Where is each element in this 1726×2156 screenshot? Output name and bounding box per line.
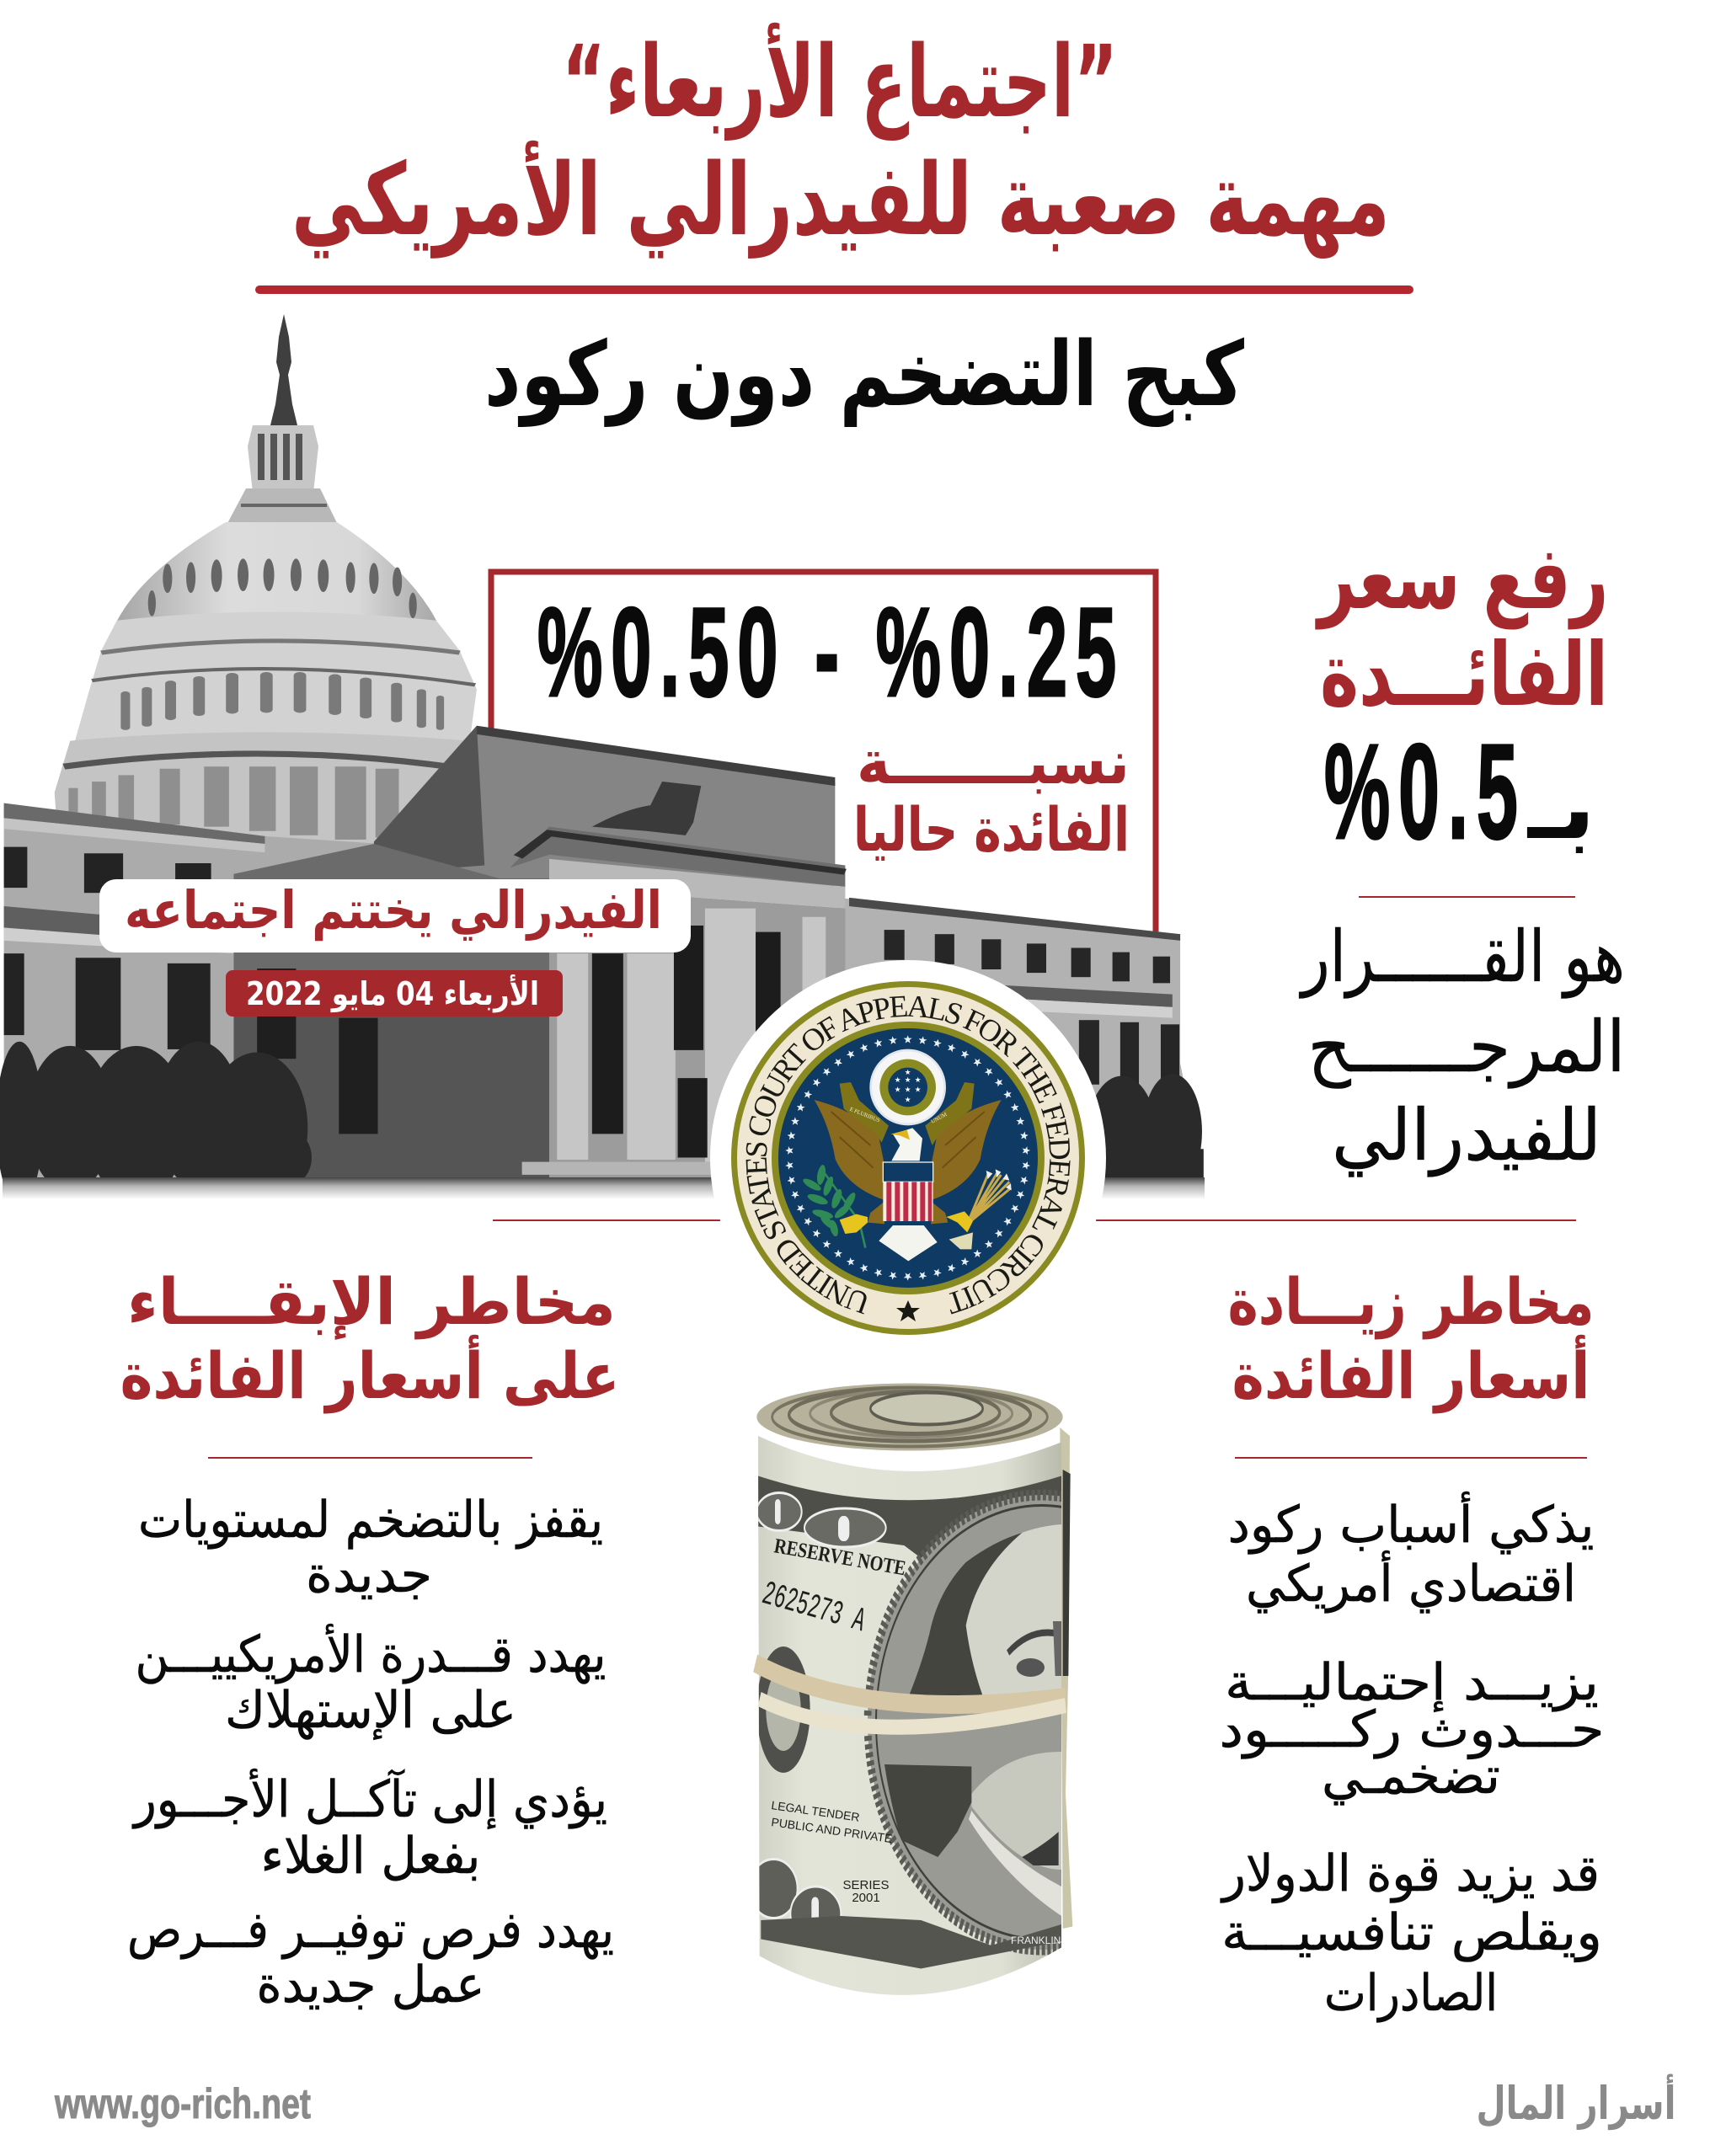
top of roll bbox=[756, 1383, 1063, 1450]
heading: مخاطر زيـــادة bbox=[1228, 1264, 1594, 1340]
rate caption bbox=[853, 727, 1130, 865]
eagle wings bbox=[815, 1100, 1002, 1224]
heading: مخاطر الإبقــــاء bbox=[127, 1264, 616, 1340]
title: ”اجتماع الأربعاء“ bbox=[562, 22, 1118, 141]
ground fade bbox=[3, 1177, 1205, 1199]
title bbox=[291, 22, 1390, 259]
roll body bbox=[758, 1436, 1061, 1995]
list: يهدد قـــدرة الأمريكييـــن bbox=[135, 1624, 607, 1684]
decision rule bbox=[1359, 896, 1575, 898]
hike amount: %0.5 bbox=[1324, 717, 1518, 867]
tail bbox=[879, 1225, 938, 1261]
list: تضخمـي bbox=[1322, 1747, 1500, 1806]
banknote text bbox=[757, 1534, 1061, 1946]
ribbon and supporters bbox=[840, 1082, 975, 1145]
rate caption: الفائدة حاليا bbox=[853, 794, 1130, 865]
panel: risks of holding rates bbox=[120, 1264, 620, 2015]
seal emblem bbox=[772, 1022, 1044, 1294]
crest: ★ bbox=[915, 1076, 922, 1085]
seal lettering: UNITED STATES COURT OF APPEALS FOR THE FEDERAL CIRCUIT bbox=[746, 995, 1071, 1314]
divider left bbox=[493, 1219, 720, 1221]
seal star bbox=[896, 1300, 920, 1321]
list: اقتصادي أمريكي bbox=[1246, 1550, 1576, 1614]
decision description: المرجــــــح bbox=[1307, 1006, 1626, 1089]
list: حـــدوث ركـــــود bbox=[1220, 1700, 1604, 1759]
eagle head bbox=[891, 1128, 922, 1161]
banknote text: FRANKLIN bbox=[1011, 1935, 1061, 1946]
rate range figure: %0.50 - %0.25 bbox=[537, 581, 1116, 723]
decision heading: رفع سعر bbox=[1315, 526, 1609, 629]
dome bbox=[114, 522, 440, 627]
decision description bbox=[1299, 915, 1626, 1177]
list: يزيـــد إحتماليـــة bbox=[1225, 1653, 1599, 1712]
crest: ★ bbox=[905, 1086, 911, 1095]
panel: current interest rate bbox=[491, 572, 1156, 935]
subtitle: كبح التضخم دون ركود bbox=[484, 323, 1244, 428]
list bbox=[127, 1491, 614, 2015]
list: الصادرات bbox=[1324, 1964, 1498, 2023]
decision heading bbox=[1315, 526, 1609, 726]
list: يهدد فرص توفيــر فـــرص bbox=[127, 1901, 614, 1960]
list bbox=[1220, 1492, 1604, 2023]
banknote text: SERIES bbox=[842, 1878, 890, 1892]
banknote text: 2625273 A bbox=[757, 1576, 869, 1641]
decision description: هو القــــــرار bbox=[1299, 915, 1625, 999]
rate caption: نسبـــــــة bbox=[857, 727, 1130, 798]
list: جديدة bbox=[306, 1545, 432, 1604]
loose note edge bbox=[1060, 1428, 1072, 1929]
banknote engraving bbox=[758, 1476, 1061, 1969]
building mass bbox=[0, 558, 1204, 1205]
illustration: rolled dollar bills bbox=[753, 1383, 1073, 1995]
panel: expected decision bbox=[1299, 526, 1626, 1177]
ring of stars bbox=[772, 1022, 1044, 1294]
illustration: capitol dome and federal reserve building bbox=[0, 314, 1213, 1216]
banknote text: RESERVE NOTE bbox=[772, 1534, 907, 1580]
divider right bbox=[1096, 1219, 1576, 1221]
heading bbox=[120, 1264, 620, 1414]
crest: ★ bbox=[905, 1076, 911, 1085]
list: ويقلص تنافسيـــة bbox=[1221, 1903, 1602, 1962]
list: على الإستهلاك bbox=[225, 1681, 516, 1740]
crest: ★ bbox=[895, 1086, 901, 1095]
seal: US Court of Appeals for the Federal Circuit bbox=[710, 960, 1106, 1335]
decision description: للفيدرالي bbox=[1332, 1094, 1601, 1177]
heading rule bbox=[1235, 1457, 1587, 1459]
crest bbox=[871, 1050, 945, 1124]
rubber bands bbox=[756, 1663, 1066, 1727]
footer website: www.go-rich.net bbox=[54, 2080, 311, 2127]
date pill: الأربعاء 04 مايو 2022 bbox=[246, 974, 539, 1012]
crest: ★ bbox=[905, 1096, 911, 1104]
crest: ★ bbox=[915, 1086, 922, 1095]
banknote text: LEGAL TENDER bbox=[771, 1798, 861, 1824]
title rule bbox=[255, 286, 1413, 294]
talons bbox=[840, 1214, 868, 1234]
hike amount: بـ bbox=[1526, 756, 1595, 859]
list: قد يزيد قوة الدولار bbox=[1220, 1844, 1600, 1903]
heading: على أسعار الفائدة bbox=[120, 1334, 620, 1414]
arrows bbox=[949, 1169, 1012, 1249]
list: يؤدي إلى تآكــل الأجـــور bbox=[131, 1769, 607, 1829]
banknote text: 2001 bbox=[852, 1891, 880, 1905]
statue and lantern bbox=[226, 314, 339, 526]
list: يذكي أسباب ركود bbox=[1228, 1492, 1594, 1555]
heading bbox=[1228, 1264, 1594, 1414]
list: عمل جديدة bbox=[256, 1956, 485, 2015]
crest: ★ bbox=[905, 1069, 911, 1077]
list: يقفز بالتضخم لمستويات bbox=[138, 1491, 603, 1550]
ribbon and supporters: E PLURIBUS bbox=[849, 1107, 881, 1123]
ribbon and supporters: UNUM bbox=[930, 1112, 948, 1125]
decision heading: الفائـــدة bbox=[1320, 623, 1608, 726]
heading: أسعار الفائدة bbox=[1232, 1334, 1590, 1414]
meeting label pill: الفيدرالي يختتم اجتماعه bbox=[125, 879, 662, 941]
list: بفعل الغلاء bbox=[261, 1827, 480, 1886]
banknote text: PUBLIC AND PRIVATE bbox=[771, 1815, 893, 1845]
crest: ★ bbox=[895, 1076, 901, 1085]
panel: risks of raising rates bbox=[1220, 1264, 1604, 2023]
shield bbox=[883, 1162, 933, 1221]
heading rule bbox=[208, 1457, 532, 1459]
olive branch bbox=[801, 1164, 865, 1248]
